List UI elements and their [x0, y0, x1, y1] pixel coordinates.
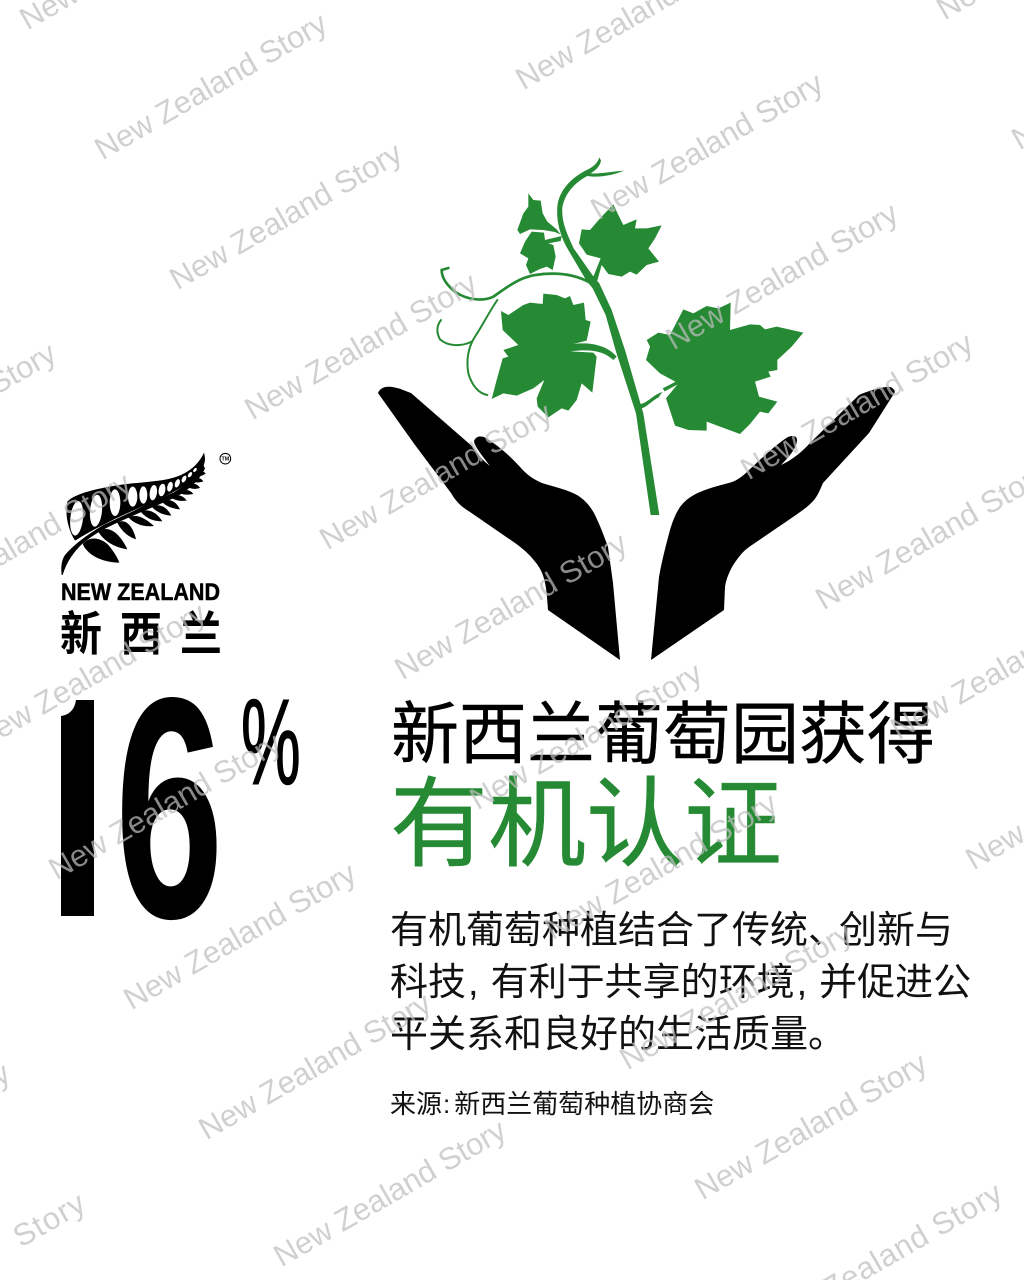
watermark: repeated New Zealand Story: New Zealand Story — [735, 325, 979, 487]
watermark: repeated New Zealand Story: New Zealand Story — [193, 985, 437, 1147]
watermark: repeated New Zealand Story: New Zealand Story — [268, 1112, 512, 1274]
watermark: repeated New Zealand Story: New Zealand Story — [164, 135, 408, 297]
watermark: repeated New Zealand Story: New Zealand Story — [314, 395, 558, 557]
watermark: repeated New Zealand Story: New Zealand Story — [43, 725, 287, 887]
big number: 16%: % — [241, 674, 301, 810]
fern upper leaflets — [66, 453, 205, 541]
body paragraph — [390, 910, 971, 1056]
watermark: repeated New Zealand Story: Story — [7, 1185, 91, 1254]
body paragraph: 科技,有利于共享的环境,并促进公 — [390, 962, 971, 1004]
watermark: repeated New Zealand Story: New Zealand Story — [389, 525, 633, 687]
title line 1: 新西兰葡萄园获得 — [391, 697, 935, 773]
big number: 16% — [61, 697, 299, 920]
icon: right hand — [651, 387, 895, 660]
watermark: repeated New Zealand Story: New Zealand Story — [689, 1045, 933, 1207]
title line 2: green highlight: 有机认证 — [390, 769, 782, 879]
icon: left hand — [378, 387, 620, 660]
logo wordmark: Chinese name: 西 — [120, 608, 162, 661]
fern stem and lower leaflets — [61, 465, 205, 575]
watermark: repeated New Zealand Story: New Zealand Story — [118, 855, 362, 1017]
trademark mark: TM — [221, 457, 230, 463]
watermark: repeated New Zealand Story: New Zealand Story — [660, 195, 904, 357]
watermark: repeated New Zealand Story: New Zealand Story — [239, 265, 483, 427]
body paragraph: 有机葡萄种植结合了传统、创新与 — [390, 910, 953, 952]
watermark: repeated New Zealand Story: New Zealand Story — [539, 785, 783, 947]
trademark mark — [220, 453, 231, 464]
source note: 来源:新西兰葡萄种植协商会 — [390, 1089, 714, 1119]
logo wordmark: Chinese name: 兰 — [180, 608, 222, 661]
icon: grapevine — [437, 157, 803, 515]
watermark: repeated New Zealand Story: New Zealand Story — [614, 915, 858, 1077]
watermark: repeated New Zealand Story: New Zealand Story — [89, 5, 333, 167]
logo wordmark: NEW ZEALAND: NEW ZEALAND — [61, 579, 220, 606]
watermark: repeated New Zealand Story: New Zealand Story — [464, 655, 708, 817]
logo wordmark: Chinese name: 新 — [60, 608, 102, 661]
watermark: repeated New Zealand Story: New Zealand Story — [585, 65, 829, 227]
body paragraph: 平关系和良好的生活质量。 — [390, 1014, 846, 1056]
big number: 16%: 6 — [115, 632, 224, 984]
